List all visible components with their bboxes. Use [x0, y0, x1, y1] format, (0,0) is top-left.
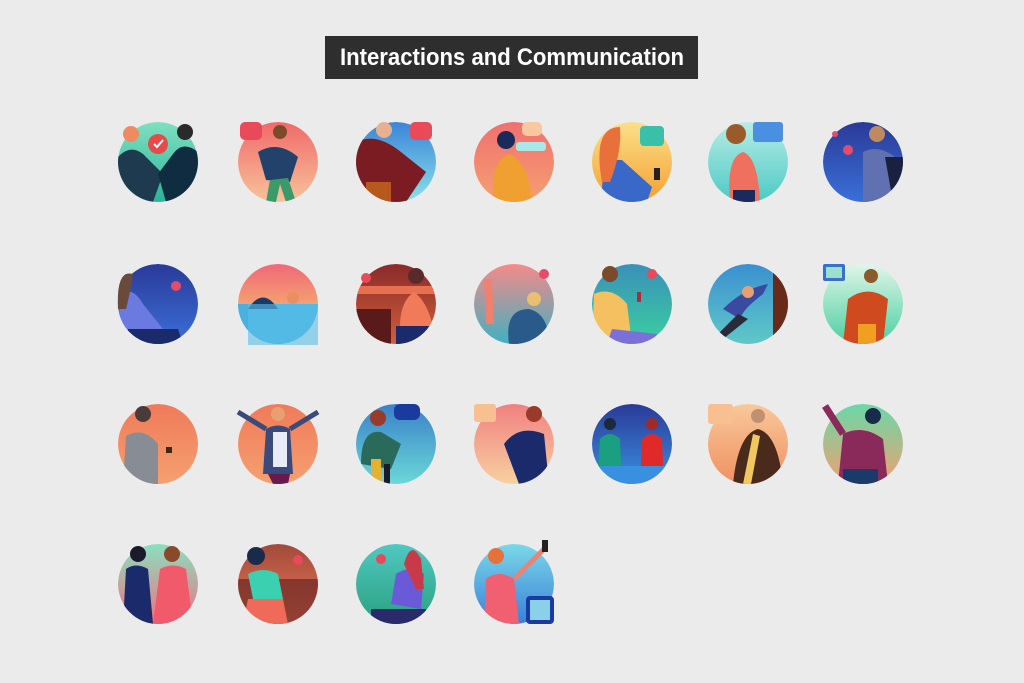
icon: bearded man — [474, 404, 554, 484]
icon: man with heart — [823, 122, 903, 202]
icon: man with bubble — [708, 122, 788, 202]
icon: man waving — [823, 404, 903, 484]
icon: selfie woman — [474, 540, 554, 624]
icon: couple hugging — [118, 544, 198, 624]
icon: emoji chat walk — [238, 122, 318, 202]
icon: woman kneeling — [356, 544, 436, 624]
icon: bar couple — [356, 264, 436, 344]
icon: couple city — [592, 404, 672, 484]
icon: man at window — [356, 122, 436, 202]
title — [325, 36, 698, 79]
icon: woman with bag — [356, 404, 436, 484]
icon: man at pool — [238, 264, 318, 345]
icon: woman at bar — [238, 544, 318, 624]
icon: old man with bubble — [708, 404, 788, 484]
title: Interactions and Communication — [340, 44, 684, 71]
icon: man drinking — [592, 264, 672, 344]
icon: man with photo — [823, 264, 903, 344]
icon: woman with wine — [118, 264, 198, 344]
icon: man running — [708, 264, 788, 344]
icon: woman texting — [592, 122, 672, 202]
icon: woman with phone — [474, 122, 554, 202]
icon: man arms open — [238, 404, 318, 484]
icon: handshake — [118, 122, 198, 202]
icon: man grey sweater — [118, 404, 198, 484]
icon: group chat — [474, 264, 554, 344]
